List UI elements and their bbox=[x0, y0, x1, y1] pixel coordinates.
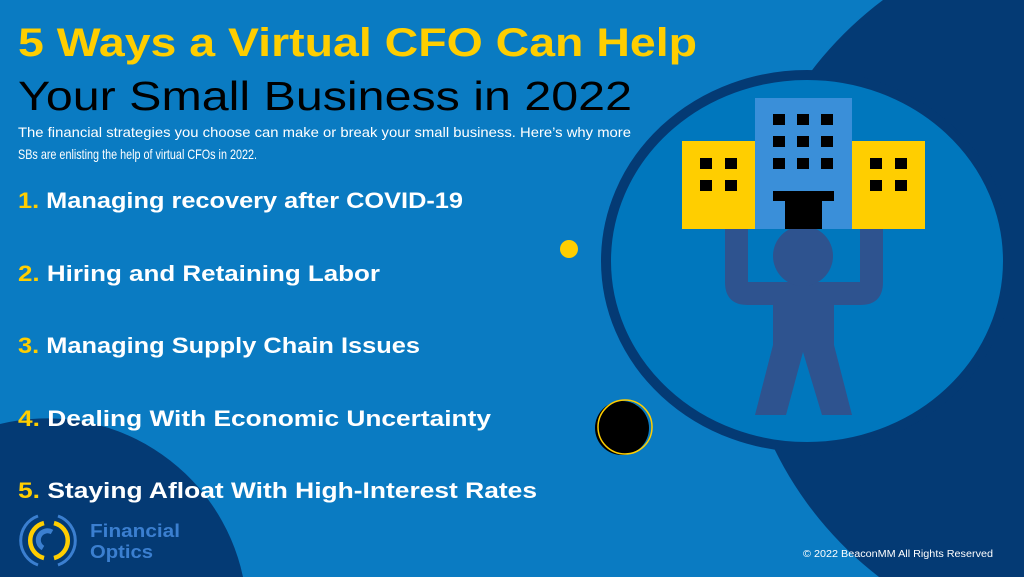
item 3: 3. Managing Supply Chain Issues bbox=[18, 333, 420, 358]
person arms bbox=[725, 229, 883, 305]
decorative black circle bbox=[595, 400, 652, 455]
item 4: 4. Dealing With Economic Uncertainty bbox=[18, 406, 492, 431]
item 5: 5. Staying Afloat With High-Interest Rates bbox=[18, 478, 537, 503]
decorative yellow dot bbox=[560, 240, 578, 258]
logo: Optics bbox=[90, 542, 153, 562]
title line 2: Your Small Business in 2022 bbox=[18, 73, 632, 119]
person body bbox=[755, 290, 852, 415]
background: dark circle bottom-left bbox=[0, 418, 243, 577]
illustration: person lifting buildings bbox=[682, 98, 925, 415]
copyright: © 2022 BeaconMM All Rights Reserved bbox=[803, 549, 993, 560]
logo icon bbox=[21, 516, 75, 565]
title line 1: 5 Ways a Virtual CFO Can Help bbox=[18, 21, 697, 65]
building center bbox=[755, 98, 852, 229]
subtitle: SBs are enlisting the help of virtual CFOs in 2022. bbox=[18, 146, 257, 162]
subtitle: The financial strategies you choose can make or break your small business. Here’s why more bbox=[18, 124, 631, 140]
subtitle bbox=[18, 124, 631, 162]
building right bbox=[852, 141, 925, 229]
list items bbox=[18, 188, 537, 503]
item 1: 1. Managing recovery after COVID-19 bbox=[18, 188, 463, 213]
item 2: 2. Hiring and Retaining Labor bbox=[18, 261, 381, 286]
ring circle bbox=[606, 75, 1008, 447]
person head bbox=[773, 226, 833, 286]
building left bbox=[682, 141, 755, 229]
background: dark circle right bbox=[738, 0, 1024, 577]
logo text: Financial bbox=[90, 521, 180, 541]
logo bbox=[21, 516, 180, 565]
